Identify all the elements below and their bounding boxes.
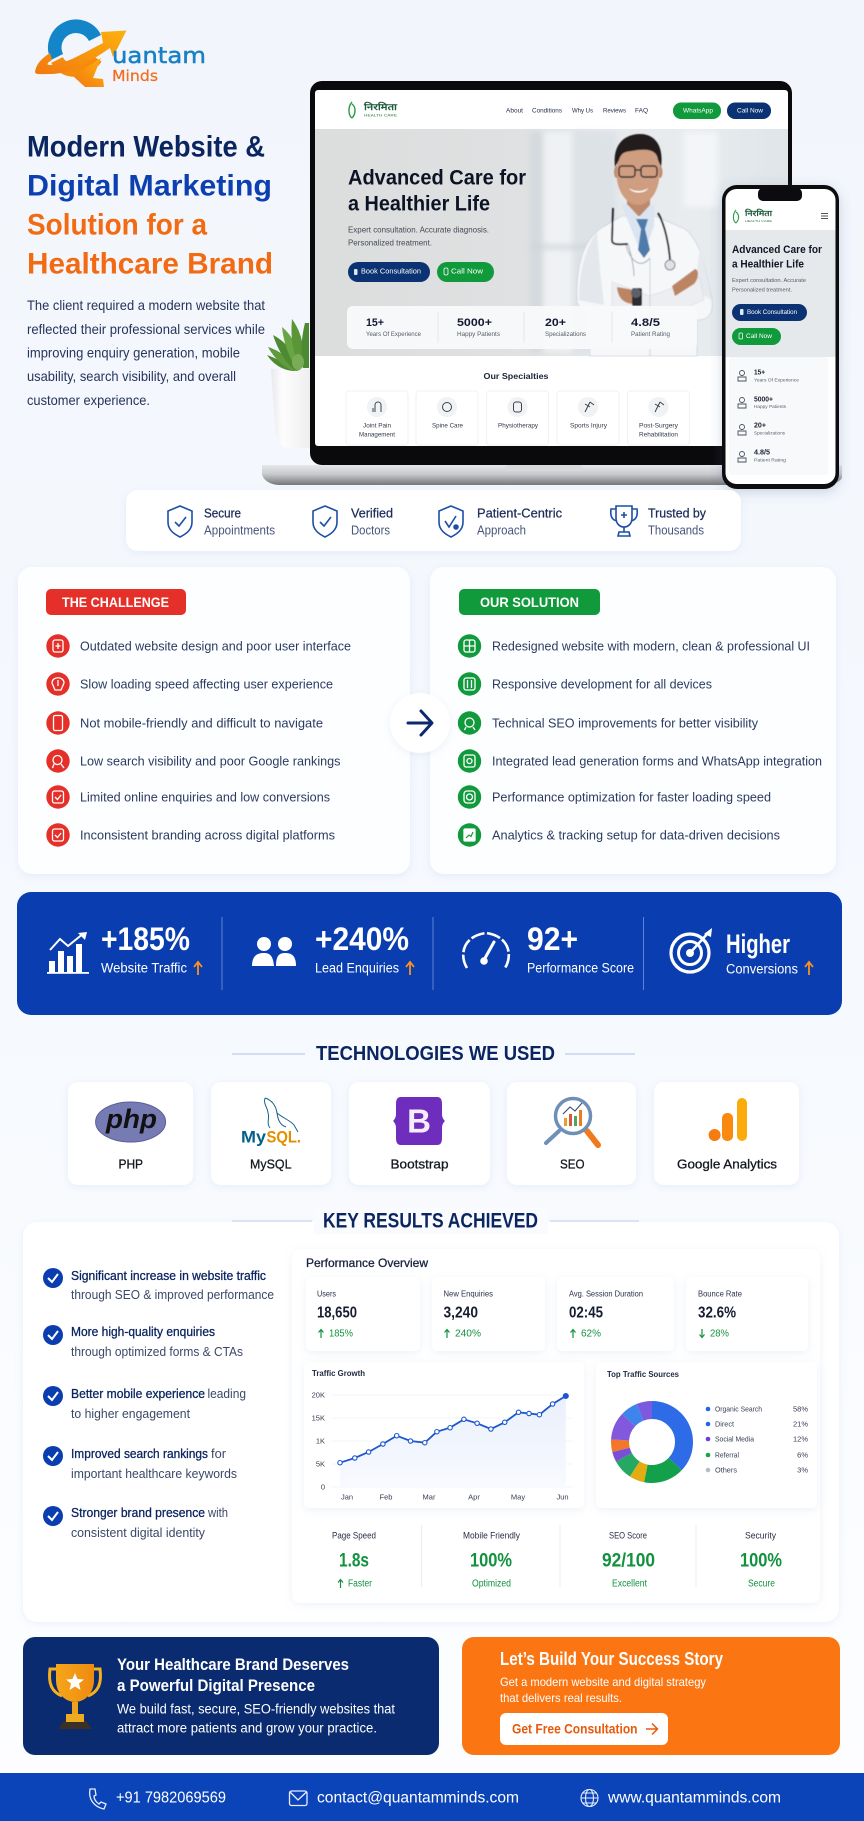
phone stats: Years Of Experience — [754, 378, 799, 384]
phone hero subtitle: Expert consultation. Accurate — [732, 278, 806, 284]
specialty cards — [346, 391, 690, 445]
logo: Google Analytics — [709, 1098, 747, 1141]
hero photo backdrop — [315, 129, 788, 356]
hero stats card: Specializations — [545, 332, 586, 338]
laptop bezel — [310, 81, 792, 465]
metric card: bounce rate: Bounce Rate — [698, 1290, 743, 1298]
tech card: MySQL — [211, 1082, 331, 1185]
icon: trophy — [611, 506, 637, 536]
challenge list: Inconsistent branding across digital platforms — [80, 828, 335, 842]
results checklist: consistent digital identity — [71, 1526, 206, 1540]
bottom metrics: 1.8s — [339, 1550, 369, 1572]
button: get free consultation — [500, 1713, 668, 1745]
hero subtitle — [348, 226, 489, 248]
metric card: new enquiries: 3,240 — [444, 1304, 478, 1322]
bottom metrics: Secure — [748, 1578, 775, 1590]
metric card: new enquiries: New Enquiries — [444, 1290, 493, 1298]
Book Consultation button — [348, 262, 430, 282]
hero stats card: 15+ — [366, 317, 384, 329]
results checklist: Significant increase in website traffic — [71, 1269, 266, 1283]
site nav: Why Us — [572, 108, 594, 114]
badge: our solution: OUR SOLUTION — [480, 594, 579, 610]
metric card: users: Users — [317, 1290, 336, 1298]
solution list: Performance optimization for faster loading speed — [492, 790, 771, 804]
hero stats card: 5000+ — [457, 317, 492, 329]
stat: website traffic: +185% — [101, 921, 190, 957]
hero stats card: 4.8/5 — [631, 317, 660, 329]
metric card: new enquiries: 240% — [455, 1328, 481, 1340]
solution list — [492, 638, 822, 842]
heading: technologies: TECHNOLOGIES WE USED — [316, 1043, 555, 1065]
laptop base — [262, 465, 842, 485]
stat: lead enquiries: +240% — [315, 921, 409, 957]
hero stats card: Happy Patients — [457, 332, 500, 338]
challenge list: Not mobile-friendly and difficult to navigate — [80, 716, 323, 730]
trust bar — [126, 490, 741, 551]
donut legend: 58% — [793, 1404, 808, 1414]
site logo — [349, 101, 398, 118]
icon: shield patient-centric — [439, 506, 463, 537]
donut legend: 3% — [797, 1466, 808, 1474]
icon: growth chart — [47, 932, 89, 974]
hero description: customer experience. — [27, 392, 150, 408]
phone hero subtitle: Personalized treatment. — [732, 288, 792, 294]
metric card: bounce rate: 28% — [710, 1328, 729, 1340]
solution list: Integrated lead generation forms and WhatsApp integration — [492, 754, 822, 768]
phone stats — [738, 370, 799, 464]
metric card: users: 18,650 — [317, 1304, 357, 1322]
phone stats: 15+ — [754, 370, 765, 376]
stat: performance score: Performance Score — [527, 960, 634, 976]
logo: PHP: php — [105, 1104, 157, 1134]
icon: globe — [581, 1790, 598, 1806]
dashboard panel — [292, 1249, 820, 1603]
icon: people — [252, 937, 296, 966]
bottom metrics: SEO Score — [609, 1530, 647, 1542]
CTA: healthcare brand: We build fast, secure, SEO-friendly websites that — [117, 1702, 395, 1716]
bottom metrics: Security — [745, 1530, 776, 1542]
hero stats card: Years Of Experience — [366, 332, 422, 338]
CTA: success story: Get a modern website and digital strategy — [500, 1675, 706, 1689]
site logo: निरमिता — [363, 101, 398, 112]
site nav: FAQ — [635, 108, 648, 114]
logo: Bootstrap: B — [407, 1102, 431, 1140]
logo: MySQL: My — [241, 1128, 267, 1146]
phone stats: 4.8/5 — [754, 450, 770, 456]
chart card: traffic growth: 5K — [316, 1460, 325, 1468]
hero subtitle: Expert consultation. Accurate diagnosis. — [348, 226, 489, 234]
tech card: PHP: PHP — [118, 1156, 143, 1172]
chart card: traffic growth: 20K — [312, 1390, 325, 1400]
CTA: healthcare brand: Your Healthcare Brand Deserves — [117, 1656, 349, 1674]
solution list: Responsive development for all devices — [492, 676, 712, 692]
metric card: bounce rate — [686, 1277, 808, 1351]
logo: MySQL — [241, 1098, 301, 1146]
icon: shield verified — [313, 506, 337, 537]
trust labels: Trusted by — [648, 506, 706, 520]
CTA: success story: Let’s Build Your Success Story — [500, 1649, 723, 1669]
chart card: traffic growth — [304, 1362, 584, 1508]
icon: shield secure — [168, 506, 192, 537]
Our Specialties heading: Our Specialties — [484, 371, 549, 381]
hero title — [348, 166, 527, 216]
donut legend: Direct — [715, 1420, 735, 1428]
Call Now button — [727, 102, 771, 119]
heading: key results: KEY RESULTS ACHIEVED — [323, 1210, 538, 1232]
phone hero backdrop — [726, 230, 836, 357]
hero subtitle: Personalized treatment. — [348, 238, 432, 248]
phone Call Now button — [732, 328, 781, 345]
WhatsApp button: WhatsApp — [683, 108, 713, 114]
results checklist: leading — [208, 1387, 246, 1401]
stat: higher conversions — [726, 929, 813, 976]
stat: performance score: 92+ — [527, 921, 578, 957]
CTA: healthcare brand — [23, 1637, 439, 1755]
CTA: success story — [462, 1637, 840, 1755]
trust labels: Approach — [477, 522, 526, 538]
specialty cards: Spine Care — [432, 422, 463, 430]
bottom metrics: Faster — [348, 1578, 373, 1590]
logo: Bootstrap — [393, 1097, 445, 1145]
metric card: users: 185% — [329, 1328, 353, 1340]
hero stats card: 20+ — [545, 317, 566, 329]
logo: MySQL: SQL. — [266, 1128, 301, 1146]
panel: key results — [23, 1208, 839, 1622]
donut legend: 6% — [797, 1450, 808, 1460]
donut legend — [706, 1404, 808, 1474]
logo: SEO magnifier — [546, 1098, 598, 1145]
hero description: improving enquiry generation, mobile — [27, 344, 240, 360]
phone stats: 20+ — [754, 422, 766, 430]
specialty cards: Joint Pain — [363, 422, 391, 430]
laptop mockup — [262, 81, 842, 485]
phone logo: HEALTH CARE — [745, 219, 772, 223]
doctor photo illustration — [577, 134, 712, 356]
hero title: Advanced Care for — [348, 166, 527, 190]
CTA: healthcare brand: a Powerful Digital Presence — [117, 1677, 315, 1695]
results checklist: Improved search rankings — [71, 1447, 208, 1461]
stat: website traffic — [101, 921, 202, 976]
trust labels: Doctors — [351, 522, 390, 538]
stat: lead enquiries: Lead Enquiries — [315, 960, 399, 976]
phone hero title — [732, 244, 823, 270]
decorative plant in white pot — [267, 319, 310, 448]
specialty cards: Management — [359, 432, 395, 438]
donut legend: 21% — [793, 1420, 808, 1428]
phone hero subtitle — [732, 278, 806, 294]
phone logo: निरमिता — [744, 208, 773, 218]
footer contact bar: +91 7982069569 — [116, 1790, 226, 1806]
solution list: Analytics & tracking setup for data-driven decisions — [492, 828, 780, 842]
metric card: session duration — [557, 1277, 674, 1351]
phone hero title: a Healthier Life — [732, 258, 804, 270]
challenge icons — [46, 634, 70, 847]
donut legend: Others — [715, 1466, 737, 1474]
chart card: top traffic sources: Top Traffic Sources — [607, 1369, 679, 1379]
donut chart — [620, 1410, 684, 1474]
stat: lead enquiries — [315, 921, 414, 976]
tech card: Google Analytics — [654, 1082, 799, 1185]
bottom metrics: Optimized — [472, 1578, 511, 1590]
laptop screen — [315, 90, 788, 446]
hero heading: Healthcare Brand — [27, 248, 273, 280]
CTA: healthcare brand: attract more patients and grow your practice. — [117, 1720, 377, 1736]
results checklist: through optimized forms & CTAs — [71, 1345, 243, 1359]
results checklist: Stronger brand presence — [71, 1506, 205, 1520]
donut legend: Organic Search — [715, 1404, 762, 1414]
tech card: PHP — [68, 1082, 193, 1185]
specialty cards: Sports Injury — [570, 422, 608, 430]
footer contact bar: www.quantamminds.com — [607, 1790, 781, 1806]
site logo: HEALTH CARE — [364, 114, 398, 118]
badge: the challenge: THE CHALLENGE — [62, 594, 169, 610]
Call Now hero button: Call Now — [451, 268, 484, 276]
stats band — [17, 892, 842, 1015]
trust labels: Verified — [351, 506, 393, 520]
donut legend: Referral — [715, 1450, 739, 1460]
button: get free consultation: Get Free Consultation — [512, 1722, 638, 1736]
tech card: Google Analytics: Google Analytics — [677, 1156, 778, 1172]
results checklist: More high-quality enquiries — [71, 1325, 215, 1339]
chart card: traffic growth: 1K — [316, 1436, 325, 1446]
donut legend: 12% — [793, 1434, 808, 1444]
chart card: traffic growth: Feb — [380, 1492, 392, 1502]
donut legend: Social Media — [715, 1434, 755, 1444]
site nav: Reviews — [603, 108, 627, 114]
Book Consultation button: Book Consultation — [361, 268, 421, 276]
stat: website traffic: Website Traffic — [101, 960, 187, 976]
specialty cards: Post-Surgery — [639, 422, 679, 430]
trust labels: Patient-Centric — [477, 506, 562, 520]
logo: Quantam Minds: uantam — [112, 44, 206, 69]
hero description: usability, search visibility, and overall — [27, 368, 236, 384]
hero heading: Digital Marketing — [27, 170, 272, 202]
stat: higher conversions: Conversions — [726, 962, 798, 976]
stat: higher conversions: Higher — [726, 929, 790, 959]
phone Book Consultation button: Book Consultation — [747, 309, 797, 316]
phone notch — [758, 188, 802, 201]
tech card: MySQL: MySQL — [250, 1156, 292, 1172]
logo: Quantam Minds — [35, 26, 206, 87]
icon: gold trophy — [50, 1664, 100, 1729]
chart card: traffic growth: 15K — [312, 1414, 325, 1422]
bottom metrics: Mobile Friendly — [463, 1530, 520, 1542]
results checklist: for — [211, 1447, 226, 1461]
hero heading — [27, 130, 273, 280]
metric card: bounce rate: 32.6% — [698, 1304, 736, 1322]
phone hero title: Advanced Care for — [732, 244, 823, 256]
panel: the challenge — [18, 567, 410, 874]
hero stats card — [347, 306, 697, 349]
challenge list: Low search visibility and poor Google rankings — [80, 754, 341, 768]
badge: our solution — [459, 589, 600, 615]
metric card: new enquiries — [432, 1277, 545, 1351]
icon: mail — [290, 1791, 307, 1806]
challenge list: Outdated website design and poor user interface — [80, 638, 351, 654]
site nav: About — [506, 108, 523, 114]
hamburger menu — [821, 214, 828, 218]
logo: Quantam Minds: Minds — [112, 67, 158, 85]
phone logo — [733, 208, 773, 223]
hero heading: Modern Website & — [27, 130, 265, 164]
phone Call Now button: Call Now — [746, 333, 772, 340]
Call Now hero button — [437, 262, 494, 282]
solution list: Redesigned website with modern, clean & professional UI — [492, 638, 810, 654]
chart card: traffic growth: May — [511, 1492, 525, 1502]
arrow connector — [390, 693, 450, 753]
results checklist: to higher engagement — [71, 1407, 191, 1421]
WhatsApp button — [673, 102, 721, 119]
chart card: traffic growth: Jun — [556, 1492, 569, 1502]
site nav: Conditions — [532, 108, 563, 114]
phone mockup — [722, 185, 839, 489]
CTA: success story: that delivers real results. — [500, 1691, 622, 1705]
phone stats: Patient Rating — [754, 458, 786, 464]
bottom metrics: 92/100 — [602, 1550, 655, 1572]
chart card: traffic growth: 0 — [321, 1482, 325, 1492]
icon: phone — [90, 1789, 106, 1809]
phone stats: Happy Patients — [754, 404, 787, 410]
bottom metrics: 100% — [740, 1550, 782, 1572]
badge: the challenge — [46, 589, 186, 615]
stat: performance score — [527, 921, 634, 976]
chart card: traffic growth: Jan — [341, 1492, 353, 1502]
hero description — [27, 297, 265, 408]
results checklist: through SEO & improved performance — [71, 1288, 274, 1302]
results checklist: with — [207, 1506, 228, 1520]
bottom metrics — [332, 1525, 782, 1590]
metric card: session duration: 02:45 — [569, 1304, 603, 1322]
tech card: Bootstrap — [349, 1082, 490, 1185]
challenge list: Slow loading speed affecting user experience — [80, 676, 333, 692]
bottom metrics: Excellent — [612, 1578, 647, 1590]
trust labels: Thousands — [648, 522, 704, 538]
hero description: The client required a modern website that — [27, 297, 265, 313]
tech card: SEO: SEO — [560, 1156, 584, 1172]
panel: our solution — [430, 567, 836, 874]
results checklist: Better mobile experience — [71, 1387, 205, 1401]
specialty cards: Physiotherapy — [498, 422, 539, 430]
tech card: Bootstrap: Bootstrap — [390, 1156, 448, 1172]
tech card: SEO — [507, 1082, 636, 1185]
laptop hinge notch — [505, 465, 583, 471]
phone screen — [726, 189, 836, 484]
hero heading: Solution for a — [27, 208, 207, 242]
challenge list — [80, 638, 351, 842]
metric card: users — [306, 1277, 420, 1351]
results checklist: important healthcare keywords — [71, 1467, 237, 1481]
phone stats panel — [729, 357, 828, 475]
metric card: session duration: Avg. Session Duration — [569, 1290, 643, 1298]
heading: key results — [232, 1208, 639, 1234]
chart card: traffic growth: Traffic Growth — [312, 1368, 365, 1378]
trust labels: Secure — [204, 506, 241, 520]
bottom metrics: Page Speed — [332, 1530, 376, 1542]
solution icons — [458, 634, 481, 847]
challenge list: Limited online enquiries and low conversions — [80, 790, 330, 804]
phone stats: 5000+ — [754, 396, 773, 404]
dashboard panel: Performance Overview — [306, 1256, 428, 1270]
chart card: top traffic sources — [596, 1362, 817, 1508]
phone stats: Specializations — [754, 430, 786, 436]
icon: gauge — [463, 933, 509, 968]
bottom metrics: 100% — [470, 1550, 512, 1572]
results checklist — [43, 1268, 274, 1540]
specialty cards: Rehabilitation — [639, 432, 678, 438]
chart card: traffic growth: Apr — [468, 1492, 480, 1502]
icon: target — [671, 928, 712, 972]
site nav — [506, 108, 648, 114]
hero stats card: Patient Rating — [631, 332, 670, 338]
phone Book Consultation button — [732, 304, 807, 321]
hero description: reflected their professional services while — [27, 321, 265, 337]
chart card: traffic growth: Mar — [423, 1492, 436, 1502]
Call Now button: Call Now — [737, 108, 763, 114]
footer contact bar: contact@quantamminds.com — [317, 1790, 519, 1806]
trust labels — [204, 506, 706, 538]
solution list: Technical SEO improvements for better visibility — [492, 716, 758, 730]
hero title: a Healthier Life — [348, 192, 490, 216]
trust labels: Appointments — [204, 522, 275, 538]
metric card: session duration: 62% — [581, 1328, 601, 1340]
footer contact bar — [0, 1773, 864, 1821]
